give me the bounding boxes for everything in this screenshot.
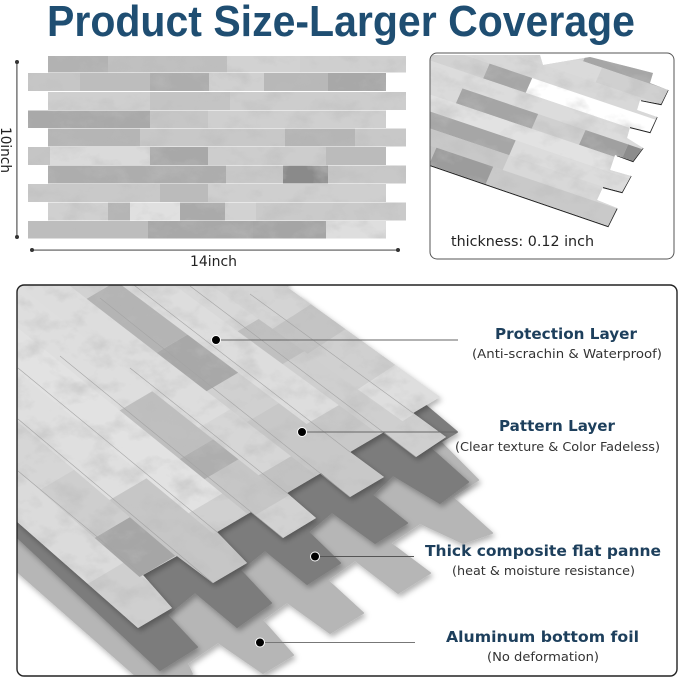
panel border <box>17 285 677 676</box>
angled tile photo <box>430 55 668 228</box>
callout: aluminum foil <box>256 628 639 664</box>
layer: aluminum bottom foil <box>18 442 496 676</box>
layer: pattern and protection strips <box>18 286 449 632</box>
tile edge shadow <box>430 90 668 226</box>
layer: thick composite flat panel <box>18 404 472 675</box>
width label: 14inch <box>190 254 237 270</box>
strip divider lines <box>18 282 416 583</box>
callout: protection layer <box>212 325 662 361</box>
thickness label: thickness: 0.12 inch <box>451 234 594 250</box>
exploded layers <box>18 286 496 676</box>
callout: composite panel: Thick composite flat panne <box>425 542 661 560</box>
callout: pattern layer: (Clear texture & Color Fadeless) <box>455 440 660 454</box>
panel border <box>430 53 674 259</box>
panel: front view of tile with dimensions <box>0 56 406 270</box>
callout: protection layer: Protection Layer <box>495 325 638 343</box>
height dimension line <box>15 60 19 239</box>
callout: aluminum foil: (No deformation) <box>487 650 599 664</box>
callout: protection layer: (Anti-scrachin & Waterproof) <box>472 347 662 361</box>
callout: pattern layer: Pattern Layer <box>499 417 616 435</box>
callout: composite panel <box>310 542 661 578</box>
callout: aluminum foil: Aluminum bottom foil <box>446 628 639 646</box>
callout: pattern layer <box>298 417 660 454</box>
panel: thickness photo <box>430 52 674 260</box>
tile sheet front view <box>28 56 406 238</box>
callout: composite panel: (heat & moisture resistance) <box>452 564 635 578</box>
width dimension line <box>30 248 400 252</box>
panel: layer structure <box>16 284 678 677</box>
